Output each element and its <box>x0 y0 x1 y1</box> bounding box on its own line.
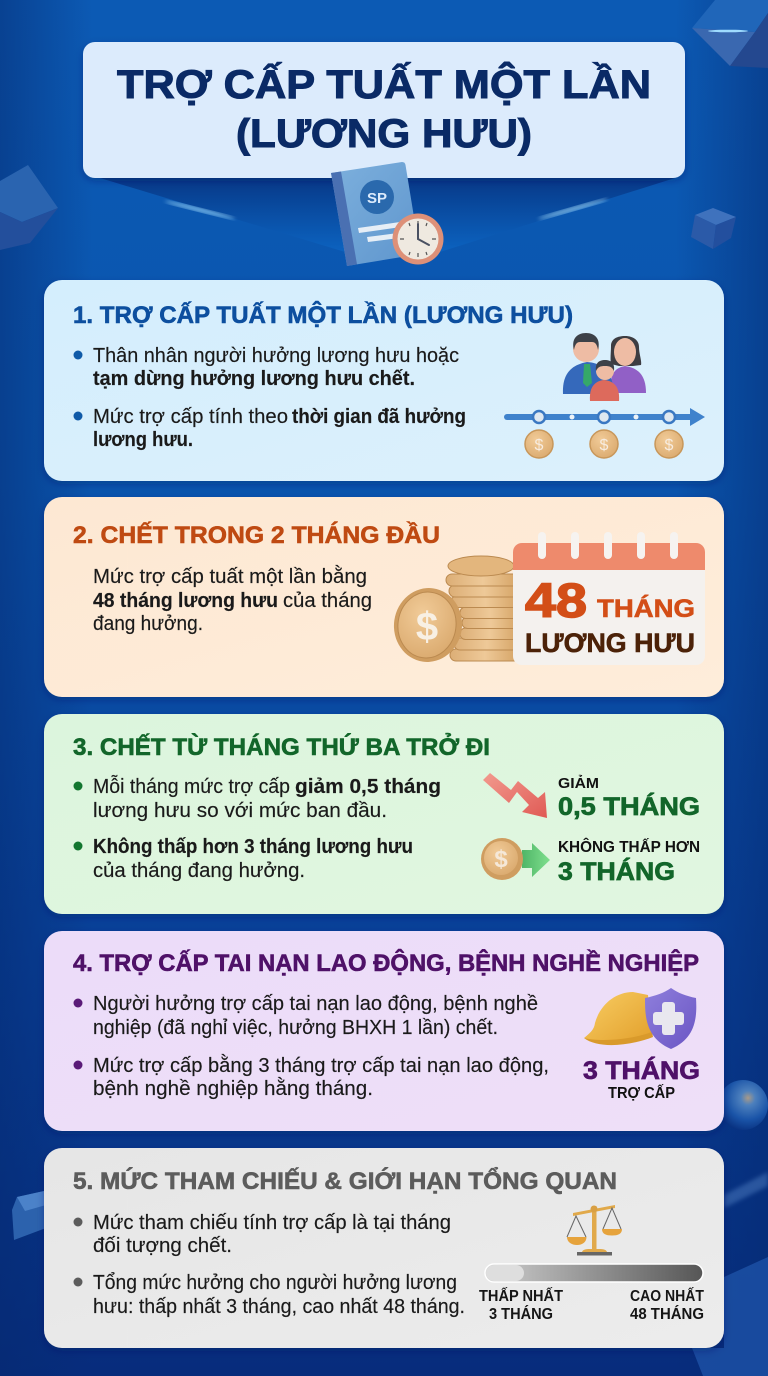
panel 4 <box>44 931 724 1131</box>
bullets 1: lương hưu. <box>93 429 193 451</box>
body text 2: của tháng <box>283 590 372 612</box>
timeline with coins: $ <box>600 437 609 454</box>
bullets 5: hưu: thấp nhất 3 tháng, cao nhất 48 tháng. <box>93 1296 465 1318</box>
body text 2 <box>93 565 372 635</box>
label: lowest: THẤP NHẤT <box>479 1288 563 1305</box>
decorative cube: lower left <box>12 1191 46 1240</box>
bullets 1 <box>74 345 466 451</box>
icon: coin stack: $ <box>416 605 438 649</box>
decorative sphere <box>718 1080 768 1130</box>
bullets 3: Mỗi tháng mức trợ cấp <box>93 775 290 798</box>
decorative cube: top right <box>692 0 768 68</box>
calendar: 48 <box>525 575 587 628</box>
bullets 3: lương hưu so với mức ban đầu. <box>93 800 387 822</box>
body text 2: đang hưởng. <box>93 613 203 635</box>
label: lowest: 3 THÁNG <box>489 1306 553 1323</box>
bullets 1: Thân nhân người hưởng lương hưu hoặc <box>93 345 459 367</box>
title panel <box>83 42 685 178</box>
heading 1: 1. TRỢ CẤP TUẤT MỘT LẦN (LƯƠNG HƯU) <box>73 301 573 329</box>
label: not lower than: KHÔNG THẤP HƠN <box>558 837 700 856</box>
heading 4: 4. TRỢ CẤP TAI NẠN LAO ĐỘNG, BỆNH NGHỀ NGHIỆP <box>73 949 699 977</box>
icon: coin and green arrow: $ <box>494 846 508 873</box>
bullets 3: giảm 0,5 tháng <box>295 776 441 798</box>
bullets 1: thời gian đã hưởng <box>292 406 466 428</box>
icon: family <box>563 333 646 401</box>
label: not lower than: 3 THÁNG <box>558 857 675 886</box>
panel 5 <box>44 1148 724 1348</box>
title <box>117 61 651 156</box>
bullets 4 <box>74 993 549 1100</box>
title: (LƯƠNG HƯU) <box>236 112 532 156</box>
bullets 3: của tháng đang hưởng. <box>93 860 305 882</box>
label: 3 months allowance: 3 THÁNG <box>583 1056 700 1085</box>
label: decrease <box>558 775 700 821</box>
icon: coin stack <box>389 556 520 666</box>
label: decrease: GIẢM <box>558 775 599 792</box>
label: not lower than <box>558 837 700 886</box>
heading 5: 5. MỨC THAM CHIẾU & GIỚI HẠN TỔNG QUAN <box>73 1167 617 1195</box>
heading 2: 2. CHẾT TRONG 2 THÁNG ĐẦU <box>73 521 440 549</box>
title: TRỢ CẤP TUẤT MỘT LẦN <box>117 61 651 107</box>
icon: helmet and shield <box>584 988 696 1049</box>
label: decrease: 0,5 THÁNG <box>558 792 700 821</box>
icon: pension book and clock: SP <box>367 190 387 207</box>
range bar <box>485 1264 703 1282</box>
bullets 5: đối tượng chết. <box>93 1235 232 1257</box>
bullets 5 <box>74 1212 465 1318</box>
bullets 4: Mức trợ cấp bằng 3 tháng trợ cấp tai nạn lao động, <box>93 1054 549 1077</box>
heading 3: 3. CHẾT TỪ THÁNG THỨ BA TRỞ ĐI <box>73 732 490 761</box>
panel 1 <box>44 280 724 481</box>
icon: down arrow <box>483 773 547 818</box>
label: highest: 48 THÁNG <box>630 1306 704 1323</box>
bullets 5: Tổng mức hưởng cho người hưởng lương <box>93 1272 457 1294</box>
label: 3 months allowance <box>583 1056 700 1102</box>
calendar: LƯƠNG HƯU <box>525 628 695 658</box>
icon: coin and green arrow <box>481 838 550 880</box>
decorative cube: right small <box>691 208 736 249</box>
bullets 1: tạm dừng hưởng lương hưu chết. <box>93 368 415 390</box>
label: highest <box>630 1288 704 1323</box>
label: highest: CAO NHẤT <box>630 1288 704 1305</box>
bullets 4: nghiệp (đã nghỉ việc, hưởng BHXH 1 lần) chết. <box>93 1017 498 1039</box>
panel 2 <box>44 497 724 697</box>
icon: pension book and clock <box>331 162 444 266</box>
decorative cube: left <box>0 165 58 250</box>
timeline with coins <box>504 408 705 458</box>
body text 2: Mức trợ cấp tuất một lần bằng <box>93 565 367 588</box>
body text 2: 48 tháng lương hưu <box>93 590 278 612</box>
label: lowest <box>479 1288 563 1323</box>
bullets 4: bệnh nghề nghiệp hằng tháng. <box>93 1077 373 1100</box>
bullets 5: Mức tham chiếu tính trợ cấp là tại tháng <box>93 1212 451 1234</box>
label: 3 months allowance: TRỢ CẤP <box>608 1083 675 1102</box>
icon: scales <box>567 1205 622 1256</box>
bullets 1: Mức trợ cấp tính theo <box>93 406 288 428</box>
panel 3 <box>44 714 724 914</box>
timeline with coins: $ <box>535 437 544 454</box>
bullets 3 <box>74 775 441 882</box>
bullets 4: Người hưởng trợ cấp tai nạn lao động, bệnh nghề <box>93 993 538 1015</box>
light beam under title <box>100 178 675 252</box>
calendar <box>513 532 705 665</box>
calendar: THÁNG <box>597 594 695 623</box>
bullets 3: Không thấp hơn 3 tháng lương hưu <box>93 836 413 858</box>
timeline with coins: $ <box>665 437 674 454</box>
